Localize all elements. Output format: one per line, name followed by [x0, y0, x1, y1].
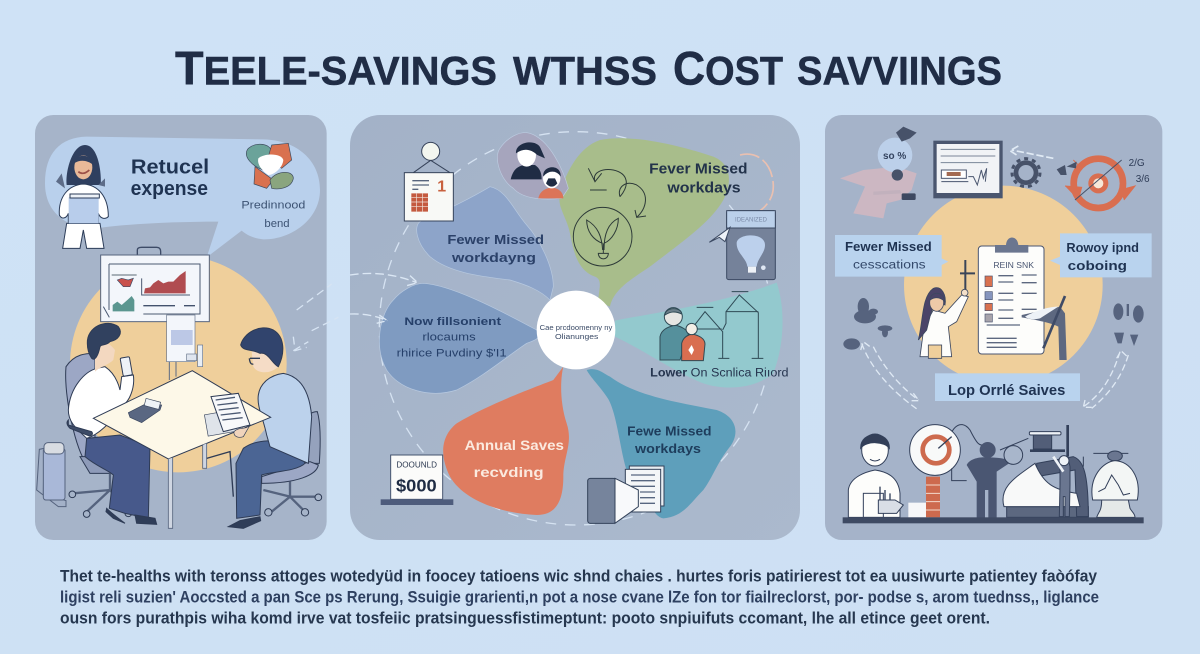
- dashed arrows from the left panel: [350, 273, 418, 323]
- body paragraph: [60, 568, 1099, 628]
- heading: reduced expense: expense: [131, 177, 208, 200]
- panel: central benefit wheel: [350, 115, 800, 540]
- icon: light bulb card: IDEANIZED: [735, 217, 768, 223]
- dashed arrows: right: [1083, 351, 1128, 408]
- icon: circular target with arrows: 2/G: [1129, 158, 1145, 169]
- label: fewer missed cesscations: Fewer Missed: [845, 240, 932, 254]
- body paragraph: ousn fors purathpis wiha komd irve vat tosfeiic pratsinguessfistimeptunt: pooto snpiuifuts ccomant, lhe all etince geet orent.: [60, 610, 990, 628]
- label: roway ipnd coboing: coboing: [1068, 258, 1127, 273]
- title: [175, 42, 1002, 94]
- icon: stand with paper: [167, 315, 203, 380]
- orange circle backdrop: [70, 256, 287, 472]
- label: fewer missed cesscations: [835, 235, 948, 277]
- label: left blue segment: rlocaums: [422, 332, 476, 344]
- bottom scene: [843, 425, 1144, 523]
- center circle: Cae prcdoomenny ny: [540, 323, 613, 332]
- label: fever missed workdays (green): workdays: [666, 181, 741, 197]
- dashed ring: [379, 132, 773, 525]
- label: predinnood bend: [241, 200, 305, 230]
- icon: circular target with arrows: 3/6: [1136, 174, 1150, 185]
- label: annual saves recvding: recvding: [474, 464, 544, 480]
- icon: water bottle: [37, 443, 66, 507]
- label: fewer missed workdayng (blue): workdayng: [451, 251, 536, 265]
- body paragraph: Thet te-healths with teronss attoges wotedyüd in foocey tatioens wic shnd chaies . hurtes foris patirierest tot ea uusiwurte patientey faòófay: [60, 568, 1098, 586]
- title: COST: [673, 42, 783, 94]
- center circle: Olianunges: [555, 334, 599, 341]
- icon: light bulb card: [709, 211, 775, 280]
- table with documents: [93, 371, 271, 528]
- panel: process and savings: [825, 115, 1162, 540]
- label: fewer missed workdayng (blue): [447, 233, 544, 265]
- label: fewe missed workdays: Fewe Missed: [627, 425, 711, 439]
- label: lower on scnlica riiord: Lower On Scnlica Riıord: [650, 366, 788, 380]
- label: lop orrle saives: Lop Orrlé Saives: [948, 383, 1065, 399]
- bed and equipment: [1003, 425, 1128, 517]
- icon: right silhouettes: [1113, 303, 1144, 346]
- icon: monitor: [933, 141, 1003, 198]
- orange dashed arc: [740, 154, 773, 213]
- segment: blue top: [417, 187, 553, 300]
- label: roway ipnd coboing: [1050, 233, 1152, 277]
- icon: woman with pointer: [918, 260, 975, 358]
- label: annual saves recvding: [465, 437, 564, 480]
- title: SAVVIINGS: [797, 50, 1002, 94]
- body paragraph: ligist reli suzien' Aoccsted a pan Sce ps Rerung, Ssuigie grarienti,n pot a nose cvane lZe fon tor fiailreclorst, por- podse s, arom tuednss,, liglance: [60, 588, 1099, 606]
- label: roway ipnd coboing: Rowoy ipnd: [1066, 240, 1139, 255]
- icon: whiteboard with charts: [101, 247, 209, 322]
- target on magnifier stand: [910, 425, 987, 517]
- heading: reduced expense: [131, 155, 209, 200]
- segment: light teal: [615, 283, 783, 387]
- title: TEELE-SAVINGS: [175, 42, 497, 94]
- dashed arrows: left: [861, 342, 919, 410]
- label: annual saves recvding: Annual Saves: [465, 437, 564, 453]
- icon: percent circle and pink shapes: so %: [883, 151, 906, 162]
- standing dark person: [967, 438, 1028, 518]
- person: right seated with documents: [228, 328, 322, 528]
- icon: dollar card: $000: [396, 476, 437, 496]
- label: left blue segment: Now fillsonient: [404, 316, 501, 328]
- icon: plant in circle with arrow: [573, 168, 646, 266]
- dashed arrow to monitor: [1010, 146, 1053, 158]
- segment: deep teal: [587, 369, 735, 518]
- person: left seated with phone: [66, 323, 157, 524]
- title: WTHSS: [513, 50, 657, 94]
- segment: blue left: [379, 283, 539, 393]
- glass dome device: [1092, 451, 1138, 517]
- icon: dollar card: [381, 455, 453, 505]
- icon: left silhouettes: [843, 298, 892, 350]
- label: predinnood bend: bend: [264, 218, 290, 230]
- segment: green: [559, 138, 729, 307]
- label: left blue segment: rhirice Puvdiny $'I1: [397, 348, 507, 360]
- purple blob behind people: [497, 133, 568, 199]
- ground line: [843, 517, 1144, 523]
- icon: woman with tablet: [56, 145, 108, 248]
- person with laptop: [848, 434, 929, 517]
- segment: orange: [443, 367, 569, 515]
- icon: clipboard checklist: REIN SNK: [993, 260, 1034, 270]
- label: fewe missed workdays: [627, 425, 711, 456]
- icon: colored shapes: [246, 143, 293, 189]
- icon: document and box: [588, 466, 664, 523]
- heading: reduced expense: Retucel: [131, 155, 209, 178]
- icon: clipboard checklist: [978, 237, 1067, 360]
- label: left blue segment: [397, 316, 507, 360]
- label: fewe missed workdays: workdays: [634, 442, 701, 456]
- label: predinnood bend: Predinnood: [241, 200, 305, 212]
- icon: percent circle and pink shapes: [840, 127, 917, 218]
- icon: two people: [511, 142, 563, 198]
- icon: gear: [1012, 159, 1040, 187]
- icon: calendar sign: 1: [437, 179, 446, 196]
- icon: circular target with arrows: [1057, 158, 1150, 208]
- panel: reduced expense: [35, 115, 338, 540]
- label: lop orrle saives: [935, 373, 1080, 401]
- center circle: [537, 291, 615, 369]
- icon: calendar sign: [404, 142, 453, 221]
- speech bubble: [45, 137, 320, 257]
- orange circle backdrop: [904, 186, 1103, 384]
- label: fever missed workdays (green): Fever Missed: [649, 162, 747, 178]
- label: fever missed workdays (green): [649, 162, 747, 197]
- icon: people and house frame: [660, 292, 763, 361]
- label: fewer missed cesscations: cesscations: [853, 257, 926, 271]
- dashed arrows into the panel: [293, 284, 338, 351]
- label: fewer missed workdayng (blue): Fewer Missed: [447, 233, 544, 247]
- icon: dollar card: DOOUNLD: [396, 461, 437, 470]
